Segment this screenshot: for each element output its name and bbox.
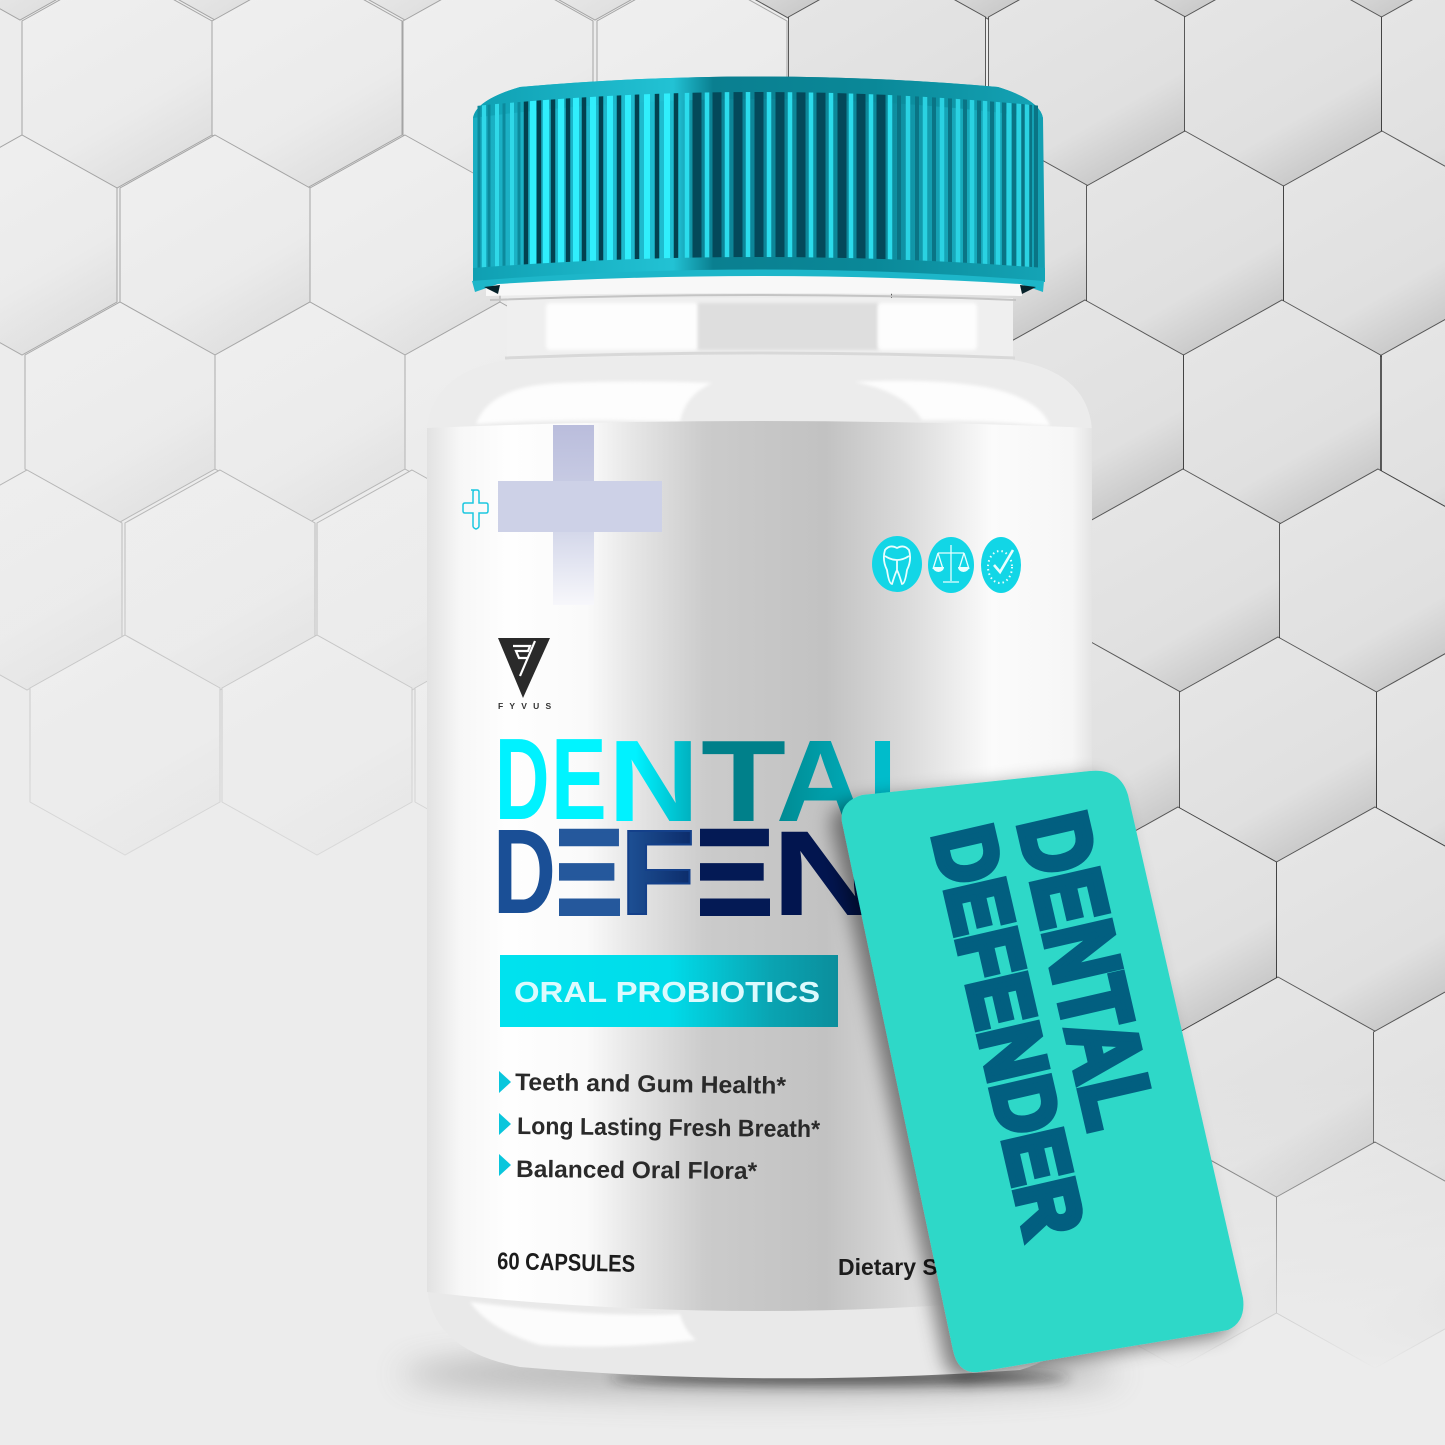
cap shell [473,76,1045,276]
heading: DENTAL [495,713,932,846]
bottle base [427,1285,1092,1378]
icon: scales [928,537,974,593]
icon: check seal [981,537,1021,593]
cap bottom lip [473,257,1045,282]
bottle label [427,421,1092,1311]
heading: DEFENDER: E [659,805,776,940]
base highlight [470,1302,696,1347]
heading: DENTAL: L [868,717,932,846]
heading: DEFENDER: N [771,805,885,941]
icon: tooth [872,536,922,592]
banner: oral probiotics [500,955,838,1027]
large cross [498,425,662,605]
bullet: teeth and gum health: Teeth and Gum Health* [515,1069,787,1100]
card text: DEFENDER: DEFENDER [914,817,1101,1245]
logo: FYVUS [498,638,557,711]
card [842,771,1243,1372]
heading: DENTAL: N [608,716,699,846]
logo: FYVUS: FYVUS [498,701,557,711]
bottle [427,275,1092,1378]
cap ribs [478,92,1038,268]
shoulder highlights [476,381,1050,426]
heading: DENTAL: E [551,716,607,844]
heading: DENTAL: T [701,717,786,846]
icon: small plus [463,490,488,529]
capsule count: 60 CAPSULES [497,1248,635,1278]
cap inner shadow [484,285,1036,294]
heading: DEFENDER [498,828,862,916]
dietary supplement: Dietary Supplement [838,1254,1054,1280]
bullet: oral flora: Balanced Oral Flora* [516,1156,758,1185]
banner: oral probiotics: ORAL PROBIOTICS [514,977,820,1009]
cap top rim [473,76,1043,118]
heading: DEFENDER: F [620,804,695,940]
heading: DEFENDER: E [523,806,625,940]
card text: DENTAL: DENTAL [998,803,1176,1137]
cap [472,76,1045,294]
benefit list [499,1069,821,1185]
bullet: fresh breath: Long Lasting Fresh Breath* [517,1113,821,1143]
heading: DEFENDER: D [493,805,556,939]
heading: DENTAL: A [776,717,865,846]
bottle shoulder [427,355,1092,430]
heading: DENTAL: D [495,713,549,844]
floor shadow [400,1352,1120,1396]
bottle neck [486,275,1022,368]
